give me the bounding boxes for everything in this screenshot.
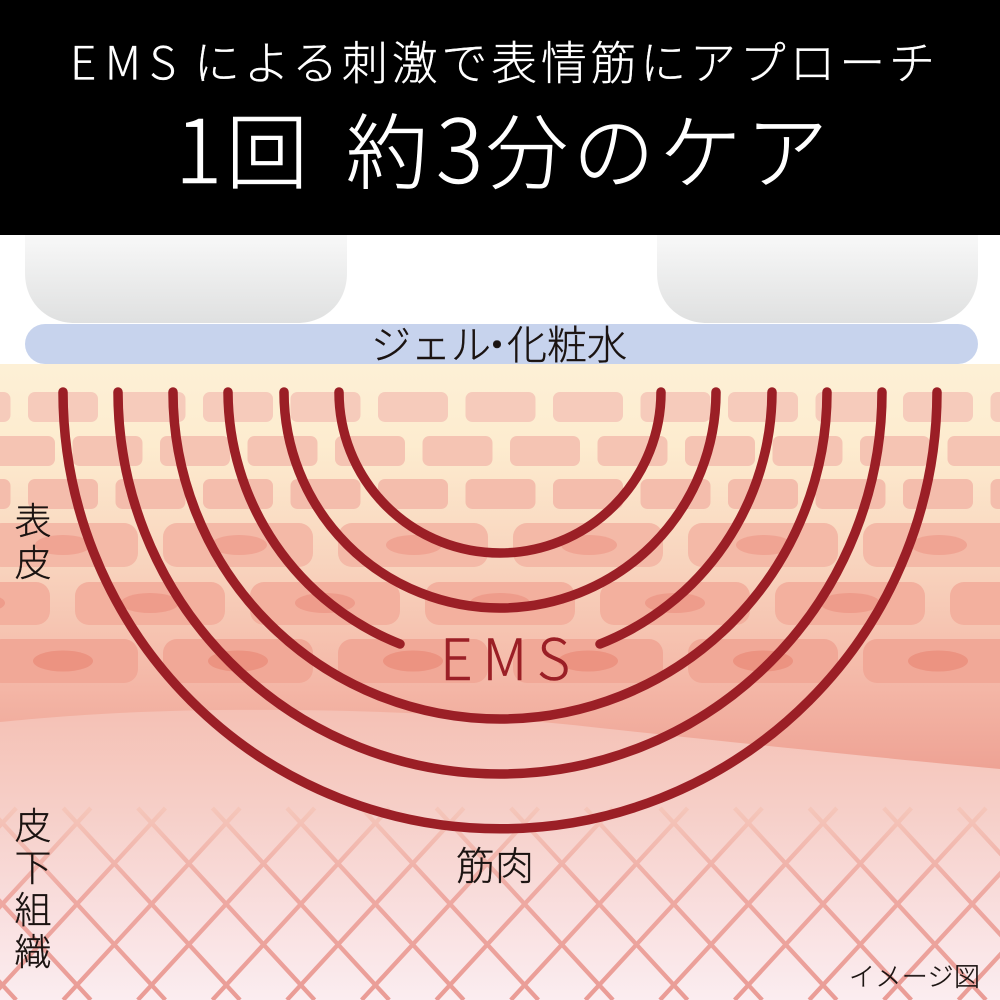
- epidermis label: 表: [14, 491, 52, 545]
- subcutaneous tissue label: 組: [14, 880, 52, 934]
- subcutaneous tissue label: 織: [14, 922, 52, 976]
- subcutaneous tissue label: 下: [14, 838, 52, 892]
- title line 1: による刺激で表情筋にアプローチ: [194, 28, 935, 94]
- title line 2: 回: [226, 87, 308, 206]
- title line 2: 約: [346, 87, 428, 206]
- gel label: 化粧水: [507, 313, 627, 371]
- epidermis cells: thin upper rows: [0, 392, 1000, 509]
- gel label: ・: [477, 313, 517, 371]
- subcutaneous layer: [0, 710, 1000, 1000]
- epidermis cells: large lower rows: [0, 523, 1000, 683]
- EMS current arcs: [63, 392, 937, 829]
- epidermis label: 皮: [14, 533, 52, 587]
- title line 2: [175, 82, 828, 209]
- image note: イメージ図: [849, 957, 980, 994]
- gel label: [371, 313, 627, 371]
- EMS label: EMS: [440, 615, 570, 697]
- gel label: ジェル: [371, 313, 491, 371]
- gel layer: [25, 313, 978, 371]
- muscle label: 筋肉: [456, 836, 534, 892]
- subcutaneous tissue label: [14, 796, 52, 976]
- title line 2: 分のケア: [486, 87, 828, 206]
- device electrode right: [657, 235, 978, 323]
- title line 1: EMS: [70, 28, 176, 94]
- epidermis label: [14, 491, 52, 587]
- panel: skin cross-section: [0, 364, 1000, 1000]
- device electrode left: [25, 235, 347, 323]
- subcutaneous tissue label: 皮: [14, 796, 52, 850]
- panel: title band: [0, 0, 1000, 235]
- title line 2: 3: [436, 82, 483, 209]
- subcutaneous mesh: [0, 808, 1000, 1000]
- title line 2: 1: [175, 82, 222, 209]
- cell nuclei: [0, 535, 968, 672]
